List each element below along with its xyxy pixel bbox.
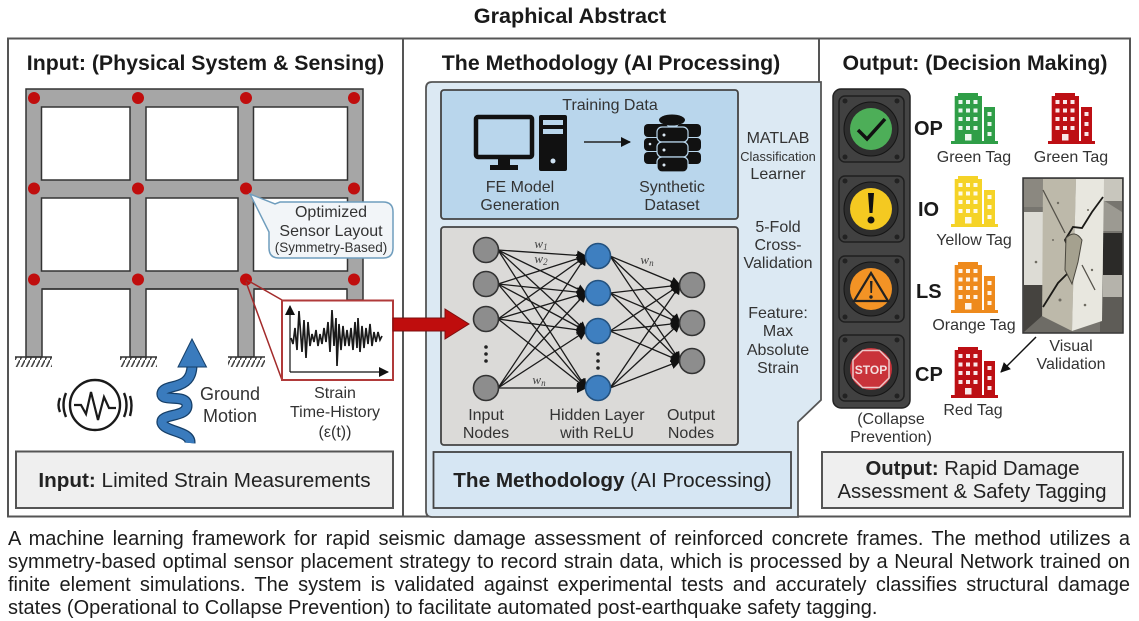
summary box: methodology xyxy=(434,452,791,508)
blue background xyxy=(426,82,821,517)
weights: w xyxy=(640,252,649,267)
level labels: OP xyxy=(914,118,943,140)
hidden nodes xyxy=(586,244,610,400)
label: ground motion: Motion xyxy=(203,406,257,426)
summary box: input: Input: Limited Strain Measurements xyxy=(38,469,371,492)
side notes: Strain xyxy=(757,360,799,377)
input nodes xyxy=(474,238,498,400)
icon: orange building xyxy=(951,262,998,313)
training data box: Synthetic xyxy=(639,179,705,196)
inset: strain time-history chart xyxy=(282,300,393,380)
tag labels: Yellow Tag xyxy=(936,232,1012,249)
panel: output xyxy=(822,51,1123,508)
callout: optimized sensor layout xyxy=(250,194,393,258)
icon: seismic wave sensor xyxy=(58,380,132,430)
side notes: Feature: xyxy=(748,305,808,322)
heading: input: Input: (Physical System & Sensing) xyxy=(27,51,384,75)
icon: computer xyxy=(476,115,567,171)
label: collapse prevention xyxy=(850,411,932,446)
training data box: Training Data xyxy=(562,97,658,114)
arrow: visual validation to red tag xyxy=(1001,337,1036,372)
arrow: ground motion xyxy=(162,339,206,443)
neural network box: Nodes xyxy=(668,425,714,442)
icon: green building xyxy=(951,93,998,144)
summary box: methodology: The Methodology (AI Processing) xyxy=(453,469,772,492)
light: CP xyxy=(839,335,904,401)
caption text xyxy=(8,528,1130,619)
side notes: Validation xyxy=(743,255,813,272)
ground supports xyxy=(15,357,265,367)
side notes: Classification xyxy=(740,149,816,164)
caption text: symmetry-based optimal sensor placement strategy to record strain data, which is processed by a Neural Network trained on xyxy=(8,551,1130,573)
weights: 1 xyxy=(543,242,548,252)
level labels xyxy=(914,118,943,386)
callout: optimized sensor layout: Optimized xyxy=(295,204,367,221)
neural network box: Nodes xyxy=(463,425,509,442)
side notes: Cross- xyxy=(754,237,802,254)
label: strain time-history: (ε(t)) xyxy=(319,424,351,441)
neural network box: Hidden Layer xyxy=(549,407,645,424)
training data box: FE Model xyxy=(486,179,554,196)
icon: yellow building xyxy=(951,176,998,227)
callout: optimized sensor layout: Sensor Layout xyxy=(279,223,383,240)
arrow xyxy=(584,141,630,143)
training data box: Dataset xyxy=(644,197,700,214)
title: Graphical Abstract xyxy=(474,3,666,28)
side notes xyxy=(740,130,816,377)
summary box: output: Assessment & Safety Tagging xyxy=(837,481,1107,503)
weights: 2 xyxy=(543,257,548,267)
training data box xyxy=(441,90,738,219)
summary box: output xyxy=(822,452,1123,508)
side notes: Learner xyxy=(750,166,806,183)
zoom lines to inset xyxy=(246,280,282,380)
tag labels: Green Tag xyxy=(1034,149,1108,166)
tag labels: Red Tag xyxy=(943,402,1003,419)
label: ground motion xyxy=(200,384,260,426)
summary box: input xyxy=(16,452,393,508)
summary box: output: Output: Rapid Damage xyxy=(865,458,1080,480)
weights: w xyxy=(534,251,543,266)
label: strain time-history xyxy=(290,385,380,441)
light: CP: STOP xyxy=(855,363,887,377)
level labels: LS xyxy=(916,281,942,303)
heading: methodology: The Methodology (AI Processing) xyxy=(442,51,780,75)
weights: w xyxy=(532,372,541,387)
label: visual validation: Validation xyxy=(1036,356,1106,373)
structural frame xyxy=(15,89,363,367)
light: LS xyxy=(839,256,904,322)
weights: n xyxy=(649,258,654,268)
side notes: 5-Fold xyxy=(755,219,801,236)
light: OP xyxy=(839,96,904,162)
sensors xyxy=(28,92,360,286)
neural network box: with ReLU xyxy=(559,425,634,442)
icon: red building top xyxy=(1048,93,1095,144)
side notes: MATLAB xyxy=(747,130,809,147)
network connections xyxy=(498,250,680,388)
neural network box xyxy=(441,227,738,445)
side notes: Max xyxy=(763,323,793,340)
caption text: A machine learning framework for rapid seismic damage assessment of reinforced concrete frames. The method utilizes a xyxy=(8,528,1130,550)
panel: methodology xyxy=(426,51,821,517)
traffic light xyxy=(833,89,910,408)
weights xyxy=(532,236,654,388)
tag labels xyxy=(932,149,1108,419)
tag labels: Green Tag xyxy=(937,149,1011,166)
outer frame with panel dividers xyxy=(8,38,1130,517)
label: strain time-history: Strain xyxy=(314,385,356,402)
level labels: CP xyxy=(915,364,943,386)
heading: output: Output: (Decision Making) xyxy=(842,51,1108,75)
label: collapse prevention: (Collapse xyxy=(857,411,925,428)
panel: input xyxy=(15,51,393,508)
weights: w xyxy=(534,236,543,251)
icon: red building bottom xyxy=(951,347,998,398)
tag labels: Orange Tag xyxy=(932,317,1016,334)
weights: n xyxy=(541,378,546,388)
label: strain time-history: Time-History xyxy=(290,404,380,421)
caption text: finite element simulations. The system is validated against experimental tests and accurately classifies structural damage xyxy=(8,574,1130,596)
training data box: Generation xyxy=(480,197,560,214)
arrow: data flow to network xyxy=(393,309,469,339)
output nodes xyxy=(680,272,704,374)
neural network box: Output xyxy=(667,407,716,424)
photo: cracked column xyxy=(1023,178,1123,333)
side notes: Absolute xyxy=(747,342,809,359)
light: IO xyxy=(839,176,904,242)
caption text: states (Operational to Collapse Prevention) to facilitate automated post-earthquake safety tagging. xyxy=(8,597,877,619)
level labels: IO xyxy=(918,199,939,221)
icon: database stack xyxy=(644,114,701,172)
ellipsis dots xyxy=(484,345,600,370)
label: visual validation xyxy=(1036,338,1106,373)
label: visual validation: Visual xyxy=(1049,338,1093,355)
callout: optimized sensor layout: (Symmetry-Based) xyxy=(275,240,387,255)
neural network box: Input xyxy=(468,407,504,424)
label: collapse prevention: Prevention) xyxy=(850,429,932,446)
label: ground motion: Ground xyxy=(200,384,260,404)
